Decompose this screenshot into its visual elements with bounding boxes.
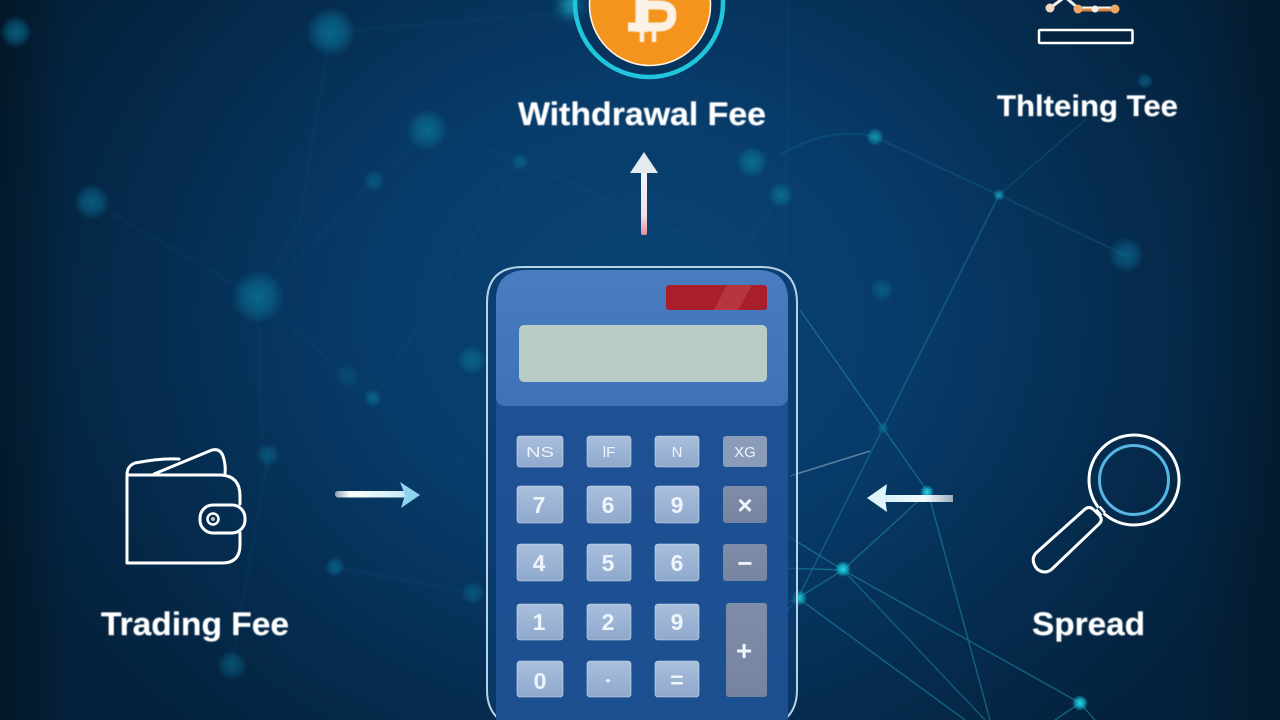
label: Spread: Spread (1032, 606, 1145, 642)
key labels: 5 (602, 550, 615, 576)
network: bright right connections (770, 120, 1125, 720)
bitcoin symbol (628, 0, 672, 42)
calculator (487, 267, 797, 720)
key labels: 4 (533, 550, 546, 576)
label: top right fee: Thlteing Tee (997, 90, 1178, 123)
arrow: right into calculator (335, 482, 420, 508)
arrow: left into calculator (867, 484, 953, 512)
key labels: = (670, 667, 684, 693)
calculator outline (487, 267, 797, 720)
keypad (517, 436, 767, 697)
red solar panel (666, 285, 767, 310)
key labels: 6 (671, 550, 683, 576)
calculator display (519, 325, 767, 382)
key labels: 0 (534, 668, 546, 694)
key labels: N (672, 444, 682, 461)
key labels: XG (734, 444, 756, 461)
arrow: up to withdrawal fee (630, 152, 658, 235)
key labels: 7 (533, 492, 545, 518)
calculator header panel (496, 270, 788, 406)
key labels: × (737, 490, 753, 520)
key labels: − (737, 548, 753, 578)
key labels: + (736, 635, 752, 666)
calculator body (496, 270, 788, 720)
icon: magnifying glass (1033, 435, 1179, 572)
key labels: 1 (533, 609, 546, 635)
key labels: 9 (671, 609, 683, 635)
network: grey line (790, 451, 870, 476)
icon: wallet (127, 450, 245, 563)
key labels: lF (603, 444, 615, 461)
key labels (526, 444, 756, 694)
key labels: 2 (602, 609, 614, 635)
key labels: 9 (671, 492, 683, 518)
label: Trading Fee: Trading Fee (101, 606, 289, 642)
icon: top right chart (1039, 0, 1132, 43)
key labels: NS (526, 444, 554, 461)
network: faint background connections (92, 0, 788, 665)
key labels: • (606, 673, 611, 688)
label: Withdrawal Fee: Withdrawal Fee (518, 96, 766, 132)
key labels: 6 (602, 492, 614, 518)
icon: bitcoin coin (562, 0, 723, 77)
